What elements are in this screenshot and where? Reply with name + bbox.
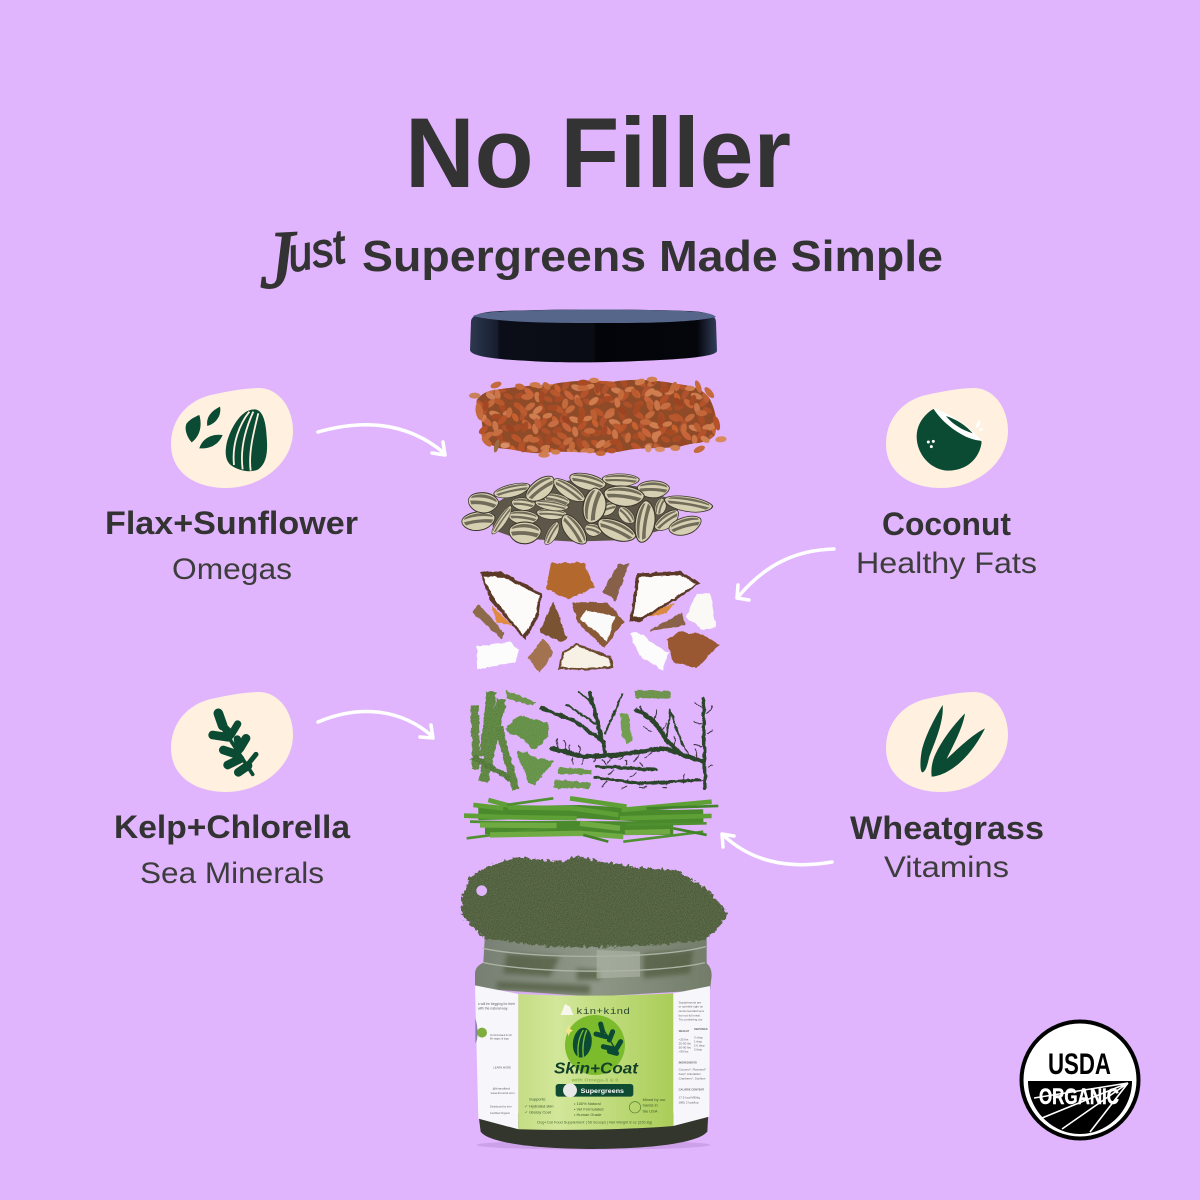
brand name: kin+kind — [576, 1007, 630, 1017]
USDA organic seal: ORGANIC — [1039, 1084, 1119, 1109]
label: white left panel: Vet-formulated for all — [490, 1034, 512, 1037]
label: white right panel: Kelp*, Dandelion — [679, 1072, 701, 1076]
arrow to wheatgrass — [722, 834, 832, 865]
benefits lists: • Human Grade — [574, 1112, 602, 1117]
label: white right panel: recommended serv — [679, 1009, 705, 1013]
USDA organic seal: USDA — [1048, 1048, 1111, 1081]
panel: flax and sunflower — [105, 388, 445, 586]
label: white right panel: >90 lbs — [679, 1050, 689, 1054]
label: white right panel: or sprinkle right on — [679, 1005, 704, 1009]
arrow to coconut — [737, 549, 834, 600]
subtitle text: Supergreens Made Simple — [362, 232, 943, 281]
label: green front panel — [518, 993, 673, 1130]
benefits lists — [525, 1097, 666, 1117]
icon: flax leaves and sunflower seed — [171, 388, 293, 488]
label: white right panel: CALORIE CONTENT — [679, 1088, 705, 1092]
layer: flax seeds — [469, 377, 727, 458]
label: white left panel: LEARN MORE — [493, 1065, 511, 1069]
label: Flax+Sunflower: Flax+Sunflower — [105, 505, 358, 541]
label: white right panel: 25-50 lbs — [679, 1042, 691, 1046]
label: white right panel: INGREDIENTS — [679, 1060, 697, 1064]
label: white right panel — [673, 986, 710, 1126]
label: white right panel: ½ tbsp — [694, 1036, 703, 1040]
label: white right panel: (ME) 2 kcal/tsp — [679, 1100, 699, 1104]
label: white right panel: <25 lbs — [679, 1038, 689, 1042]
handwritten word: Just — [256, 213, 351, 306]
benefits lists: hands in — [643, 1103, 658, 1108]
benefits lists: Mixed by our — [643, 1097, 666, 1102]
label: white left panel: with the natural way. — [478, 1006, 508, 1010]
USDA organic seal — [1022, 1022, 1138, 1138]
panel: coconut — [737, 388, 1037, 600]
panel: wheatgrass — [722, 692, 1044, 884]
label: Vitamins: Vitamins — [884, 851, 1009, 884]
seed icon — [571, 1026, 594, 1059]
label: white right panel: Cranberry*, Sunflow — [679, 1076, 706, 1080]
label: white right panel: 1½ tbsp — [694, 1044, 705, 1048]
benefits lists: ✓ Glossy Coat — [525, 1109, 552, 1114]
benefits lists: Supports: — [529, 1097, 546, 1102]
leaf sprig icon — [596, 1024, 621, 1054]
net weight line: Dog+Cat Food Supplement | 56 Scoops | Net Weight 8 oz (226.8g) — [537, 1121, 652, 1125]
panel: kelp and chlorella — [114, 692, 433, 890]
label: white right panel: Supplements are — [679, 1000, 702, 1004]
product name: Skin+Coat — [554, 1060, 639, 1077]
icon: coconut — [886, 388, 1008, 488]
label: white right panel: SERVINGS — [694, 1027, 708, 1031]
label: green front panel: Supergreens — [581, 1088, 625, 1095]
jar body — [475, 933, 712, 1150]
label: green front panel: with Omega-3 & 6 — [571, 1078, 619, 1084]
label: white right panel: but not full meal. — [679, 1013, 701, 1017]
handwritten word: Just: J — [256, 213, 301, 306]
layer: sunflower seeds — [461, 470, 713, 549]
label: Sea Minerals: Sea Minerals — [140, 857, 324, 890]
label: white right panel: 2 tbsp — [694, 1048, 702, 1052]
benefits lists: • Vet Formulated — [574, 1106, 604, 1111]
icon: wheatgrass blades — [886, 692, 1008, 792]
benefits lists: the USA — [643, 1108, 658, 1113]
kelp strips — [472, 690, 671, 790]
benefits lists: ✓ Hydrated skin — [525, 1104, 553, 1109]
label: white right panel: 1 tbsp — [694, 1040, 702, 1044]
layer: kelp and chlorella — [472, 690, 713, 790]
supergreens pill — [556, 1084, 633, 1097]
label: white right panel: 50-90 lbs — [679, 1046, 691, 1050]
label: Coconut: Coconut — [882, 506, 1011, 542]
label: Omegas: Omegas — [172, 553, 292, 586]
arrow to kelp and chlorella — [318, 712, 433, 738]
benefits lists: • 100% Natural — [574, 1101, 601, 1106]
label: white left panel: Distributed by kin+ — [490, 1104, 512, 1108]
label: Kelp+Chlorella: Kelp+Chlorella — [114, 809, 350, 845]
layer: wheatgrass — [464, 798, 718, 842]
label: white right panel: 17.5 kcal ME/kg — [679, 1096, 700, 1100]
layer: coconut pieces — [473, 563, 718, 672]
powder heap — [462, 856, 728, 947]
label: Wheatgrass: Wheatgrass — [850, 810, 1044, 846]
subtitle — [256, 213, 943, 306]
label: white left panel: @kinandkind — [493, 1086, 510, 1090]
label: white left panel: s will be begging for their — [478, 1002, 516, 1006]
handwritten word: Just: ust — [284, 220, 351, 283]
layer: supergreens powder and jar — [462, 856, 728, 1150]
label: white right panel: Try combining our — [679, 1018, 702, 1022]
title: No Filler — [405, 97, 791, 208]
label: white right panel: WEIGHT — [679, 1029, 690, 1033]
label: white left panel: life stages of dogs — [490, 1037, 510, 1040]
label: white left panel: www.kin-kind.com — [491, 1091, 515, 1095]
label: white left panel — [475, 985, 518, 1129]
arrow to flax and sunflower — [318, 425, 445, 455]
label: Healthy Fats: Healthy Fats — [856, 547, 1037, 580]
icon: kelp sprig — [171, 692, 293, 792]
jar lid — [470, 310, 717, 362]
label: white right panel: Coconut*, Flaxseed* — [679, 1068, 707, 1072]
label: white left panel: Certified Organic — [490, 1111, 511, 1115]
seaweed twigs — [542, 692, 713, 789]
